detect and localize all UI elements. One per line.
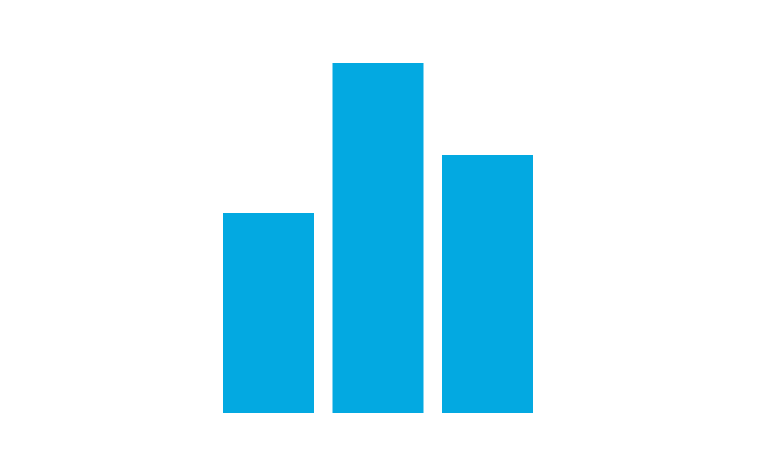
middle bar (332, 63, 424, 413)
left bar (223, 213, 314, 413)
right bar (442, 155, 533, 413)
